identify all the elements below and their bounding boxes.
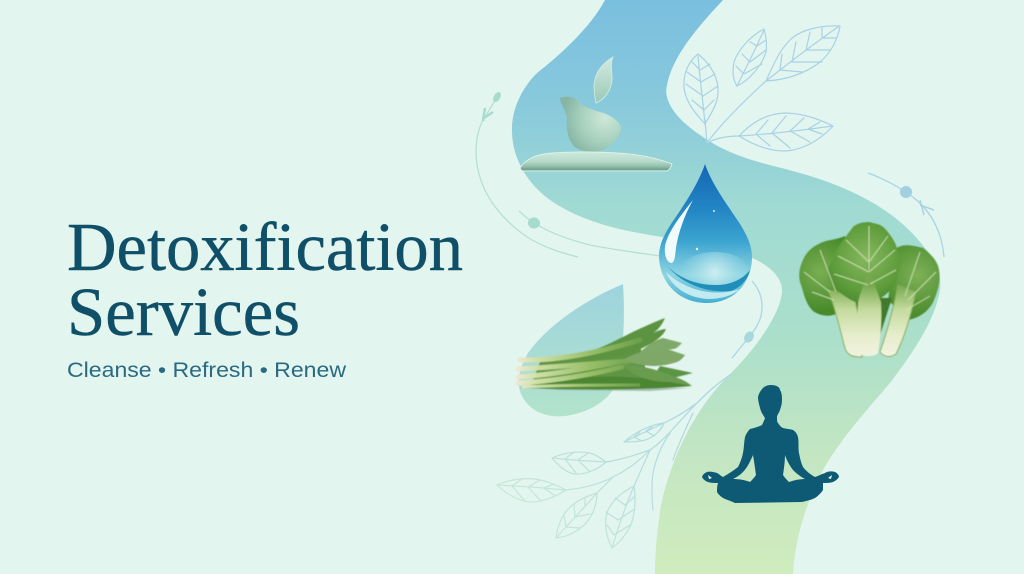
leaf outline H [556, 493, 597, 538]
drop lower dark band [667, 266, 750, 291]
leaf outline D [739, 113, 833, 151]
icon: meditating figure silhouette [702, 385, 839, 503]
long top leaf [580, 318, 666, 361]
bundle body shade [530, 345, 650, 388]
drop inner glow [681, 252, 749, 288]
lower dark leaves [520, 377, 692, 389]
platter [520, 152, 672, 171]
left stem [828, 290, 862, 357]
icon: water drop [659, 164, 752, 303]
leaf outline I [606, 486, 635, 548]
decorative curve: centre with node [519, 211, 660, 256]
centre stem [857, 262, 881, 356]
bundle shadow [525, 387, 690, 391]
leaf outline E [624, 423, 664, 442]
drop highlight [665, 200, 693, 263]
flowing ribbon [512, 0, 940, 574]
right leaf [888, 245, 940, 320]
icon: green onion bundle [518, 318, 693, 391]
teardrop leaf backdrop [519, 284, 624, 416]
drop lower light rim [666, 272, 740, 299]
decorative curve: upper right with node [868, 173, 944, 257]
hand highlights [708, 475, 832, 479]
icon: pear-shaped vessel with leaf on a platter [520, 57, 672, 171]
decorative curve: right of water drop [732, 281, 762, 358]
broad middle leaf [623, 349, 685, 366]
back leaf tip right [655, 366, 693, 378]
right stem [880, 285, 916, 356]
stalks [518, 340, 640, 383]
vessel body [560, 97, 621, 152]
tagline: Cleanse • Refresh • Renew [67, 359, 347, 382]
decorative curve: left with bud [476, 91, 578, 257]
lower broad leaf [620, 363, 692, 386]
leaf outline G [497, 479, 566, 502]
upper broad leaf [640, 338, 682, 354]
leaf outline C [766, 26, 840, 81]
line art leaves: upper right [684, 26, 840, 151]
left leaf [799, 236, 852, 316]
vessel leaf [594, 57, 613, 103]
leaf outline F [552, 452, 606, 474]
leaf veins [804, 226, 936, 310]
icon: bok choy [799, 222, 940, 357]
leaf outline B [733, 29, 766, 86]
leaf outline A [684, 54, 718, 124]
centre leaf [828, 222, 900, 304]
title: Services [67, 274, 300, 350]
title: Detoxification [67, 209, 463, 285]
line art leaves: lower left [497, 375, 730, 548]
dark gaps between stems [850, 298, 892, 335]
